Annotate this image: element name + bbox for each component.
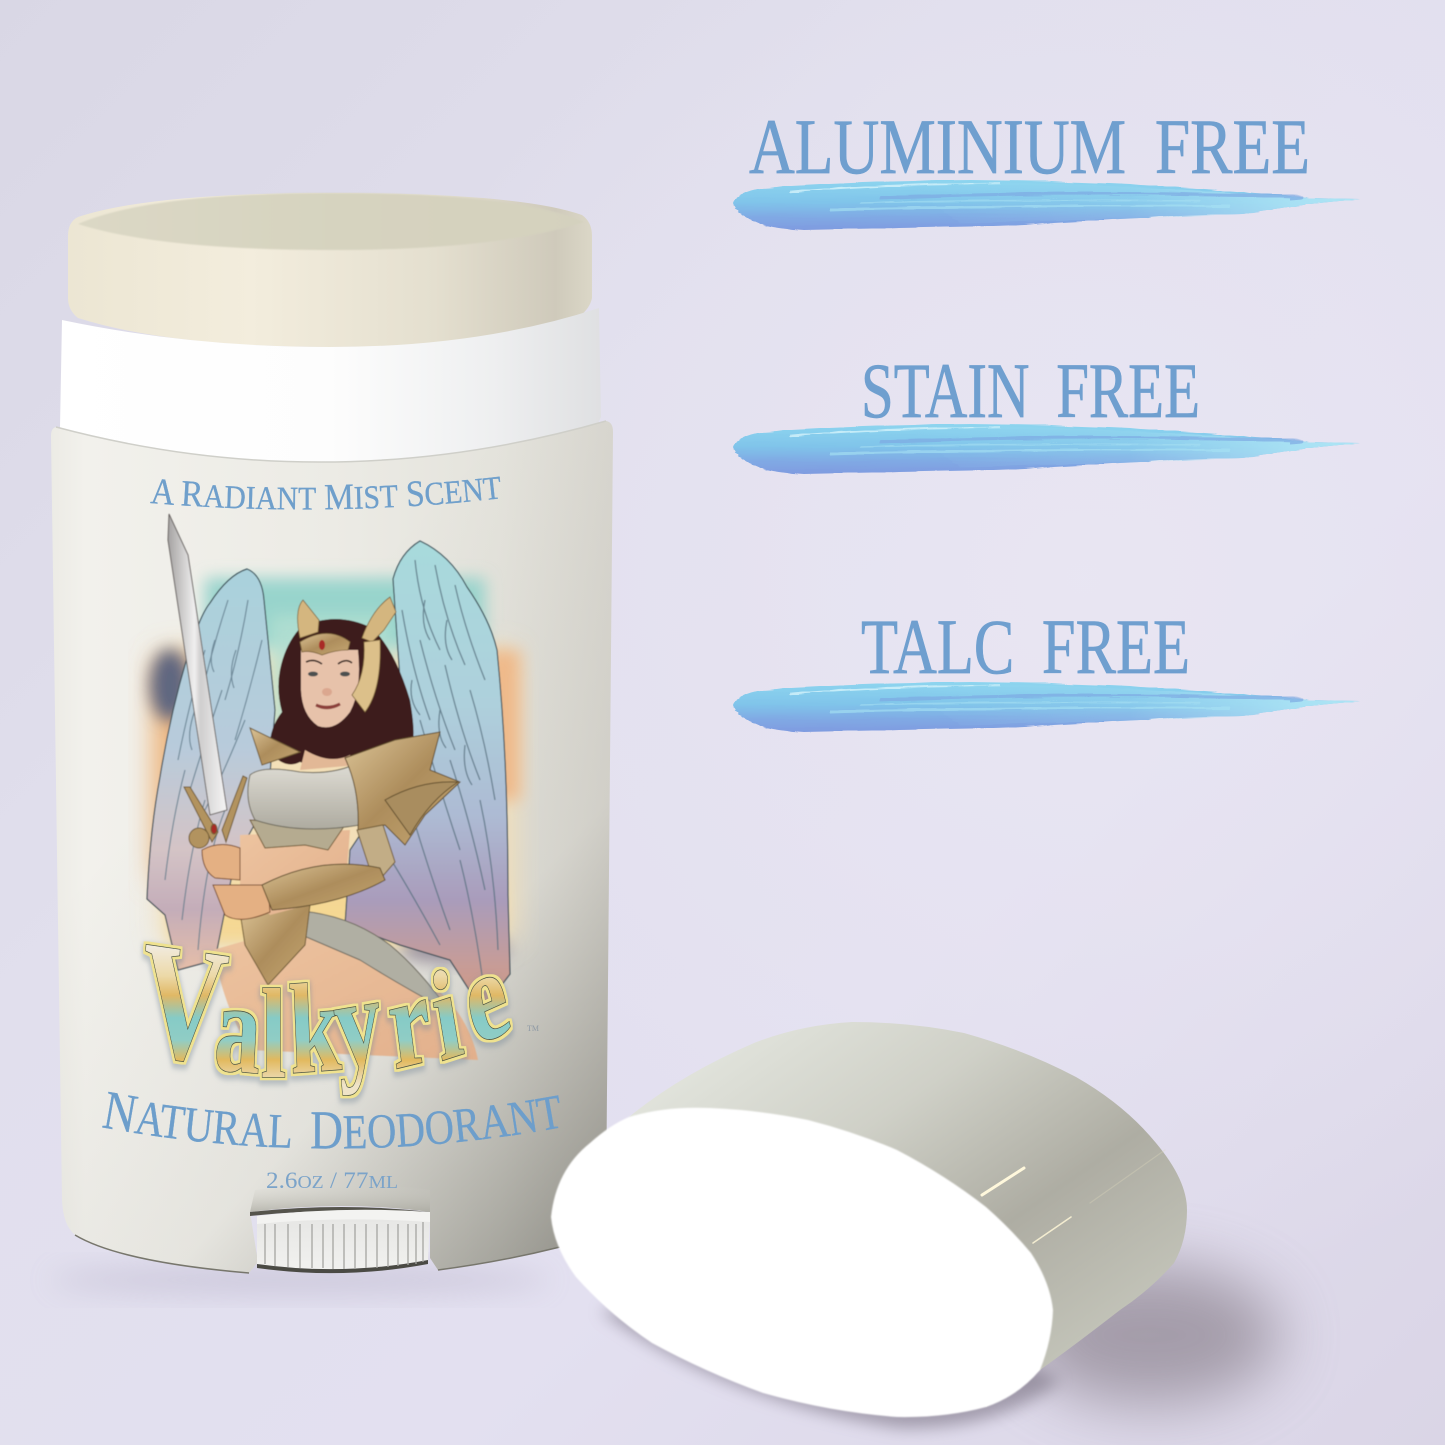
blurred sunset backdrop [150,578,520,964]
claim 1: aluminium free [733,103,1360,230]
twist wheel [250,1207,430,1273]
headband and winged helmet [298,597,396,712]
heading: STAIN FREE [861,347,1200,434]
figure lower body [213,820,478,1060]
heading: ALUMINIUM FREE [749,103,1310,190]
cast shadows on the ground [50,1265,1280,1428]
Valkyrie logo wordmark: y [329,950,387,1097]
Valkyrie logo wordmark: V [134,907,233,1101]
Valkyrie logo wordmark: r [380,948,438,1097]
trademark mark: TM [527,1024,539,1033]
Valkyrie logo wordmark: l [261,965,286,1106]
deodorant stick [51,193,613,1273]
claim 2: stain free [733,347,1360,474]
sword hilt [184,776,247,848]
product name: NATURAL DEODORANT [102,1092,560,1149]
label illustration: Valkyrie [147,514,520,1060]
white collar [60,308,601,463]
Valkyrie logo wordmark: i [422,943,470,1089]
Valkyrie logo wordmark: e [450,921,520,1073]
face [301,650,359,727]
Valkyrie logo wordmark: a [212,957,265,1102]
net weight: 2.6OZ / 77ML [266,1168,398,1193]
cap highlights [982,1150,1165,1243]
claim 3: talc free [733,603,1360,732]
sword blade [168,514,227,815]
Valkyrie logo wordmark: k [287,957,343,1102]
container body [51,421,613,1273]
label scent line: A RADIANT MIST SCENT [150,476,500,510]
right wing [345,541,510,1002]
brush stroke [733,682,1360,732]
armor and chest plate [248,728,460,885]
removed cap lying on its side [551,1022,1187,1417]
cream deodorant dome [68,193,592,347]
brush stroke [733,424,1360,474]
heading: TALC FREE [861,603,1190,690]
left wing [147,569,275,970]
cap side wall [629,1022,1187,1407]
cap open white face [551,1108,1053,1417]
hair [270,619,414,767]
hands and bracer [202,844,385,919]
brush stroke [733,180,1360,230]
